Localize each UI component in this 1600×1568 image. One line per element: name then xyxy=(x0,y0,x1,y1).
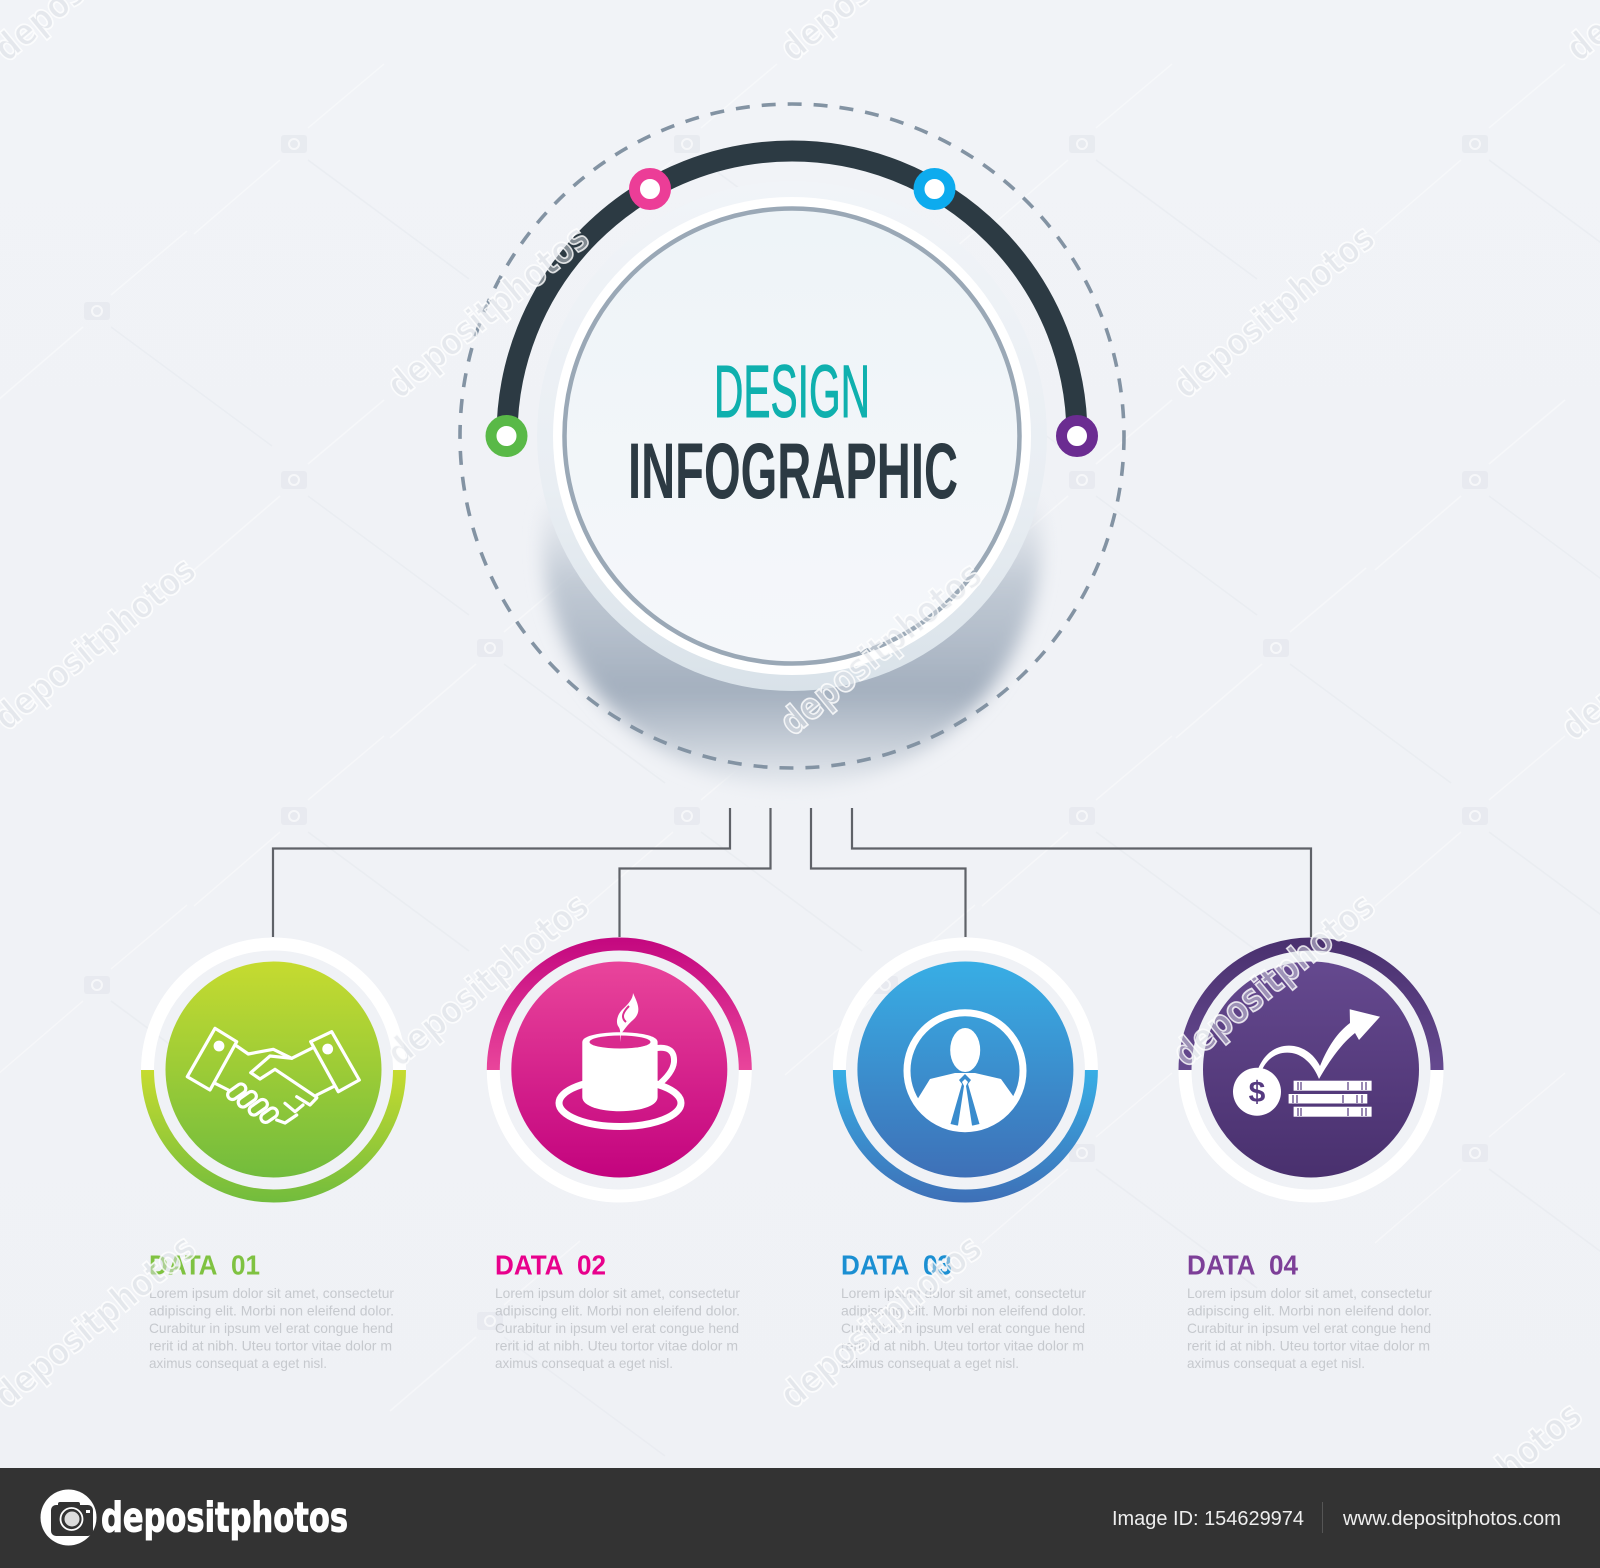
title: design: DESIGN xyxy=(714,350,870,433)
central hub xyxy=(460,104,1124,787)
footer image id: Image ID: 154629974 xyxy=(1112,1508,1304,1530)
body copy xyxy=(841,1285,1086,1371)
body copy: Curabitur in ipsum vel erat congue hend xyxy=(1187,1320,1431,1336)
body copy: Lorem ipsum dolor sit amet, consectetur xyxy=(495,1285,740,1301)
heading: DATA 03 xyxy=(841,1250,952,1280)
footer logo icon xyxy=(40,1490,96,1546)
text block: data 04 xyxy=(1187,1250,1432,1371)
body copy: rerit id at nibh. Uteu tortor vitae dolor m xyxy=(495,1338,738,1354)
dashed orbit ring xyxy=(460,104,1124,768)
body copy: rerit id at nibh. Uteu tortor vitae dolor m xyxy=(149,1338,392,1354)
node: purple xyxy=(1062,420,1092,452)
connector lines xyxy=(273,808,1311,937)
node: green xyxy=(491,420,522,452)
footer site url: www.depositphotos.com xyxy=(1342,1508,1561,1530)
watermark text: depositphotos xyxy=(378,884,597,1075)
body copy: adipiscing elit. Morbi non eleifend dolor. xyxy=(841,1302,1086,1318)
watermark text: depositphotos xyxy=(771,1226,990,1417)
badge disc xyxy=(1203,962,1419,1178)
node: blue xyxy=(919,174,950,204)
icon: money growth xyxy=(1233,1009,1380,1117)
hub outer rim xyxy=(537,181,1047,691)
body copy: Lorem ipsum dolor sit amet, consectetur xyxy=(1187,1285,1432,1301)
watermark text: depositphotos xyxy=(1164,216,1383,407)
body copy: adipiscing elit. Morbi non eleifend dolor. xyxy=(149,1302,394,1318)
hub white ring xyxy=(553,197,1031,675)
body copy: aximus consequat a eget nisl. xyxy=(1187,1355,1365,1371)
hub face xyxy=(564,208,1020,664)
icon: coffee cup xyxy=(559,993,681,1126)
badge 2: pink coffee xyxy=(493,944,745,1196)
body copy: aximus consequat a eget nisl. xyxy=(841,1355,1019,1371)
body copy xyxy=(1187,1285,1432,1371)
node: pink xyxy=(634,174,666,204)
badge disc xyxy=(166,962,382,1178)
icon: handshake xyxy=(187,1028,359,1124)
text block: data 02 xyxy=(495,1250,740,1371)
heading: DATA 01 xyxy=(149,1250,260,1280)
icon: businessman xyxy=(907,1013,1023,1135)
body copy: Curabitur in ipsum vel erat congue hend xyxy=(149,1320,393,1336)
body copy: Lorem ipsum dolor sit amet, consectetur xyxy=(149,1285,394,1301)
body copy: Curabitur in ipsum vel erat congue hend xyxy=(841,1320,1085,1336)
footer separator xyxy=(1322,1502,1324,1533)
badge disc xyxy=(857,962,1073,1178)
badge ring xyxy=(493,944,745,1196)
body copy: aximus consequat a eget nisl. xyxy=(149,1355,327,1371)
body copy: Curabitur in ipsum vel erat congue hend xyxy=(495,1320,739,1336)
badge disc xyxy=(511,962,727,1178)
heading: DATA 04 xyxy=(1187,1250,1298,1280)
badge ring xyxy=(839,944,1091,1196)
badge ring xyxy=(1185,944,1437,1196)
body copy: Lorem ipsum dolor sit amet, consectetur xyxy=(841,1285,1086,1301)
body copy: rerit id at nibh. Uteu tortor vitae dolor m xyxy=(841,1338,1084,1354)
badge 4: purple money xyxy=(1185,944,1437,1196)
watermark text: depositphotos xyxy=(771,553,990,744)
dark arc xyxy=(507,151,1077,436)
body copy: aximus consequat a eget nisl. xyxy=(495,1355,673,1371)
body copy: adipiscing elit. Morbi non eleifend dolor. xyxy=(495,1302,740,1318)
text block: data 01 xyxy=(149,1250,394,1371)
footer logo text: depositphotos xyxy=(101,1494,348,1542)
body copy xyxy=(495,1285,740,1371)
watermark text: depositphotos xyxy=(1164,884,1383,1075)
body copy: adipiscing elit. Morbi non eleifend dolor. xyxy=(1187,1302,1432,1318)
watermark text: depositphotos xyxy=(378,216,597,407)
body copy xyxy=(149,1285,394,1371)
body copy: rerit id at nibh. Uteu tortor vitae dolor m xyxy=(1187,1338,1430,1354)
hub drop shadow xyxy=(542,287,1042,787)
heading: DATA 02 xyxy=(495,1250,606,1280)
text block: data 03 xyxy=(841,1250,1086,1371)
icon: money growth: $ xyxy=(1249,1076,1266,1109)
badge 1: green handshake xyxy=(148,944,400,1196)
title: infographic: INFOGRAPHIC xyxy=(628,426,958,515)
badge ring xyxy=(148,944,400,1196)
footer bar xyxy=(0,1468,1600,1568)
badge 3: blue person xyxy=(839,944,1091,1196)
